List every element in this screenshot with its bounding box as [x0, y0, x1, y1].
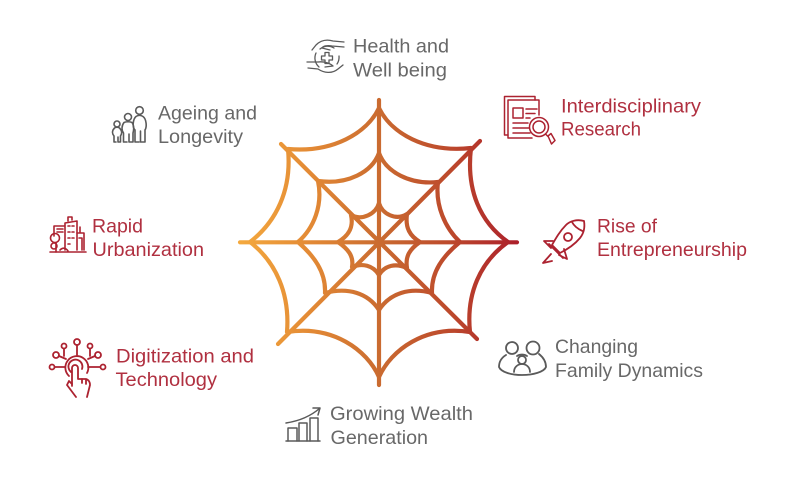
item: Rapid Urbanization — [50, 216, 204, 261]
label: Growing Wealth Generation: Generation — [330, 427, 428, 449]
item: Health and Well being — [307, 36, 449, 82]
icon: bar chart with rising arrow — [286, 408, 320, 441]
label: Rise of Entrepreneurship: Entrepreneurship — [597, 239, 747, 261]
item: Rise of Entrepreneurship — [543, 216, 747, 263]
icon: caring hands with medical cross — [307, 40, 344, 72]
item: Growing Wealth Generation — [286, 403, 473, 449]
item: Ageing and Longevity — [113, 102, 257, 148]
label: Ageing and Longevity: Ageing and — [158, 102, 257, 124]
label: Rise of Entrepreneurship: Rise of — [597, 216, 658, 238]
icon: city buildings and trees — [50, 217, 86, 252]
label: Digitization and Technology: Digitization and — [116, 346, 254, 368]
label: Changing Family Dynamics: Family Dynamics — [555, 360, 703, 382]
label: Rapid Urbanization: Urbanization — [92, 239, 204, 261]
label: Interdisciplinary Research: Research — [561, 118, 641, 140]
label: Changing Family Dynamics: Changing — [555, 336, 638, 358]
label: Ageing and Longevity: Longevity — [158, 126, 243, 148]
label: Digitization and Technology: Technology — [116, 369, 217, 391]
icon: documents with magnifier — [504, 96, 555, 144]
label: Health and Well being: Well being — [353, 60, 447, 82]
item: Changing Family Dynamics — [499, 336, 703, 382]
icon: rocket — [543, 220, 584, 263]
icon: finger touching network nodes — [50, 339, 106, 397]
icon: family group — [499, 342, 546, 375]
label: Rapid Urbanization: Rapid — [92, 216, 143, 238]
label: Growing Wealth Generation: Growing Wealth — [330, 403, 473, 425]
label: Interdisciplinary Research: Interdisciplinary — [561, 96, 701, 118]
label: Health and Well being: Health and — [353, 36, 449, 58]
icon: family of three generations — [113, 107, 146, 142]
item: Interdisciplinary Research — [504, 96, 701, 144]
spider web diagram — [240, 100, 517, 385]
item: Digitization and Technology — [50, 339, 254, 397]
